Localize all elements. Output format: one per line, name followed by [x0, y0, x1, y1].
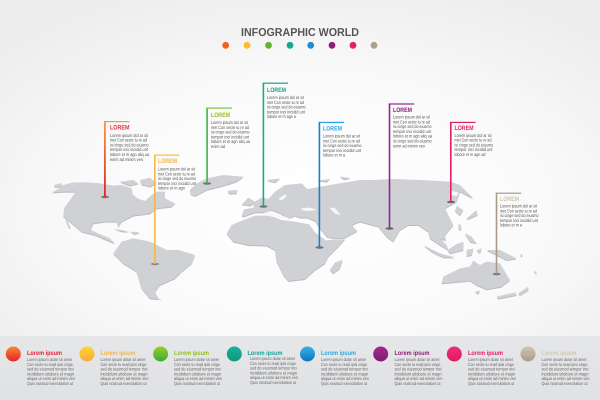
pin: tan: [492, 193, 539, 275]
legend item 2: Quis nostrud exercitation ut: [100, 381, 147, 386]
colour dots row: [222, 42, 377, 49]
pin: tan: met Con secte tu re ad: [500, 208, 537, 213]
pin: purple: [386, 103, 432, 230]
inland seas: [163, 175, 458, 219]
southeast asia and oceania: [423, 206, 537, 299]
africa and eurasia: [227, 176, 473, 281]
legend item 1: Con secte tu read ipisi cinge: [27, 362, 73, 367]
greenland and south america: [113, 175, 243, 299]
legend item 7: Quis nostrud exercitation ut: [468, 381, 515, 386]
legend item 4: [227, 346, 298, 385]
pin: teal: isi cinge sed do eiusmo: [267, 105, 306, 110]
pin: yellow: tempor inci incidid unt: [158, 181, 197, 186]
legend item 3: Con secte tu read ipisi cinge: [174, 362, 220, 367]
pin: yellow: met Con secte tu re ad: [158, 171, 195, 176]
pin: yellow: Lorem ipsum dol ar sit: [158, 166, 196, 172]
legend item 3: [153, 346, 222, 386]
pin: pink: Lorem ipsum dol ar sit: [454, 133, 492, 138]
legend item 7: Lorem ipsum dolar sit amet: [468, 357, 514, 362]
legend item 1: aliqua ut enim ad minim ven: [27, 376, 75, 381]
legend item 2: incididunt utlobore et magn: [100, 371, 148, 376]
legend item 6: Lorem ipsum: [394, 350, 430, 357]
legend item 5: aliqua ut enim ad minim ven: [321, 376, 369, 381]
pin: purple: tempor inci incidid unt: [393, 129, 432, 134]
legend item 1: sed do eiusmod tempor inci: [27, 367, 74, 372]
legend item 1: Lorem ipsum: [27, 350, 62, 357]
legend item 5: Lorem ipsum: [321, 350, 356, 357]
pin: teal: lobore et m agn a: [267, 114, 296, 119]
legend item 2: Con secte tu read ipisi cinge: [100, 362, 147, 367]
legend item 4: Lorem ipsum: [248, 350, 283, 357]
pin: blue: LOREM: [323, 126, 342, 132]
pin: teal: [260, 83, 306, 208]
legend item 6: [373, 346, 443, 386]
legend item 5: incididunt utlobore et magn: [321, 371, 368, 376]
legend item 8: aliqua ut enim ad minim ven: [542, 376, 590, 381]
pin: yellow: lobore et m agn: [158, 186, 185, 191]
legend item 4: Con secte tu read ipisi cinge: [250, 361, 296, 366]
pin: green: Lorem ipsum dol ar sit: [211, 120, 249, 125]
legend item 6: aliqua ut enim ad minim ven: [394, 376, 443, 381]
legend item 7: aliqua ut enim ad minim ven: [468, 376, 516, 381]
pin: tan: LOREM: [500, 196, 519, 203]
pin: pink: isi cinge sed do eiusmo: [454, 142, 493, 147]
bottom band: [0, 336, 600, 400]
legend item 4: incididunt utlobore et magn: [250, 370, 297, 375]
world map: [52, 175, 537, 299]
legend item 1: Quis nostrud exercitation ut: [27, 381, 74, 386]
pin: blue: Lorem ipsum dol ar sit: [323, 134, 361, 138]
legend item 8: sed do eiusmod tempor inci: [542, 367, 588, 372]
pin: tan: isi cinge sed do eiusmo: [500, 213, 539, 218]
pin: purple: Lorem ipsum dol ar sit: [393, 114, 431, 120]
legend item 7: incididunt utlobore et magn: [468, 371, 515, 376]
pin: red: tempor inci incidid unt: [110, 147, 149, 152]
pin: red: met Con secte tu re ad: [110, 138, 147, 143]
pin: purple: lobore et m agn aliq ua: [393, 134, 432, 139]
legend item 8: incididunt utlobore et magn: [542, 371, 589, 376]
pin: pink: [447, 122, 493, 203]
legend item 1: Lorem ipsum dolar sit amet: [27, 357, 73, 362]
pin: purple: met Con secte tu re ad: [393, 119, 430, 124]
legend item 6: Quis nostrud exercitation ut: [394, 381, 441, 386]
legend item 5: sed do eiusmod tempor inci: [321, 367, 368, 372]
pin: red: isi cinge sed do eiusmo: [110, 142, 149, 147]
legend item 7: [447, 346, 516, 386]
legend item 2: Lorem ipsum dolar sit amet: [100, 357, 146, 362]
legend item 8: [520, 346, 590, 386]
pin: blue: tempor inci incidid unt: [323, 148, 362, 153]
pin: yellow: [151, 154, 197, 265]
pin: yellow: isi cinge sed do eiusmo: [158, 176, 196, 181]
pin: purple: LOREM: [393, 107, 412, 114]
pin: green: lobore et m agn aliq ua: [211, 139, 250, 144]
pin: pink: lobore et m agn ad: [454, 152, 486, 157]
legend item 4: sed do eiusmod tempor inci: [250, 366, 297, 371]
pin: purple: isi cinge sed do eiusmo: [393, 124, 432, 129]
legend item 6: incididunt utlobore et magn: [394, 371, 442, 376]
pin: red: LOREM: [110, 124, 130, 132]
legend item 1: incididunt utlobore et magn: [27, 371, 74, 376]
legend item 8: Quis nostrud exercitation ut: [542, 381, 588, 386]
pin: purple: enim ad minim ven: [393, 143, 425, 148]
legend item 6: sed do eiusmod tempor inci: [394, 367, 442, 372]
north america: [52, 178, 175, 243]
pin: teal: met Con secte tu re ad: [267, 100, 304, 105]
legend item 5: Lorem ipsum dolar sit amet: [321, 357, 367, 362]
pin: yellow: LOREM: [158, 158, 177, 165]
legend item 3: Lorem ipsum dolar sit amet: [174, 357, 220, 362]
pin: green: [203, 108, 250, 185]
pin: blue: isi cinge sed do eiusmo: [323, 143, 362, 148]
pin: red: [101, 121, 149, 198]
pin: blue: met Con secte tu re ad: [323, 138, 360, 143]
legend item 8: Lorem ipsum dolar sit amet: [542, 357, 587, 362]
legend item 2: sed do eiusmod tempor inci: [100, 367, 148, 372]
pin: blue: [316, 122, 362, 249]
legend item 1: [6, 346, 75, 386]
legend item 2: Lorem ipsum: [100, 350, 136, 357]
pin: red: Lorem ipsum dol ar sit: [110, 133, 149, 138]
legend item 3: incididunt utlobore et magn: [174, 371, 221, 376]
legend item 7: Con secte tu read ipisi cinge: [468, 362, 514, 367]
legend item 4: Quis nostrud exercitation ut: [250, 380, 297, 385]
legend item 2: [80, 346, 149, 386]
pin: pink: tempor inci incidid unt: [454, 147, 493, 152]
legend item 7: sed do eiusmod tempor inci: [468, 367, 515, 372]
pin: red: enim ad minim ven: [110, 157, 143, 162]
pin: green: LOREM: [211, 112, 230, 119]
pin: teal: LOREM: [267, 87, 286, 94]
pin: green: met Con secte tu re ad: [211, 125, 249, 130]
pin: purple: isi cinge sed do eiusmo: [393, 138, 432, 144]
pin: pink: LOREM: [454, 125, 474, 132]
legend item 6: Con secte tu read ipisi cinge: [394, 362, 441, 367]
pin: tan: lobore et m a: [500, 223, 522, 228]
legend item 8: Con secte tu read ipisi cinge: [542, 362, 588, 367]
legend item 6: Lorem ipsum dolar sit amet: [394, 357, 440, 362]
pin: red: lobore et m agn aliq ua: [110, 152, 149, 157]
pin: pink: met Con secte tu re ad: [454, 138, 492, 143]
legend item 5: Quis nostrud exercitation ut: [321, 381, 368, 386]
pin: green: isi cinge sed do eiusmo: [211, 130, 250, 135]
legend item 3: sed do eiusmod tempor inci: [174, 367, 221, 372]
pin: tan: tempor inci incidid unt: [500, 218, 539, 223]
legend item 5: Con secte tu read ipisi cinge: [321, 362, 367, 367]
pin: blue: lobore et m a: [323, 153, 345, 158]
legend item 3: Lorem ipsum: [174, 350, 209, 357]
legend item 5: [300, 346, 369, 386]
pin: teal: Lorem ipsum dol ar sit: [267, 95, 305, 100]
legend item 3: aliqua ut enim ad minim ven: [174, 376, 222, 381]
pin: teal: tempor inci incidid unt: [267, 109, 306, 114]
legend item 7: Lorem ipsum: [468, 350, 503, 357]
legend item 4: Lorem ipsum dolar sit amet: [250, 356, 296, 361]
legend item 2: aliqua ut enim ad minim ven: [100, 376, 149, 381]
title: INFOGRAPHIC WORLD: [241, 27, 359, 39]
legend item 8: Lorem ipsum: [542, 350, 577, 357]
legend item 4: aliqua ut enim ad minim ven: [250, 375, 298, 380]
legend item 3: Quis nostrud exercitation ut: [174, 381, 221, 386]
pin: green: enim ad: [211, 144, 225, 149]
pin: green: tempor inci incidid unt: [211, 134, 250, 139]
pin: tan: Lorem ipsum dol ar sit: [500, 204, 538, 208]
